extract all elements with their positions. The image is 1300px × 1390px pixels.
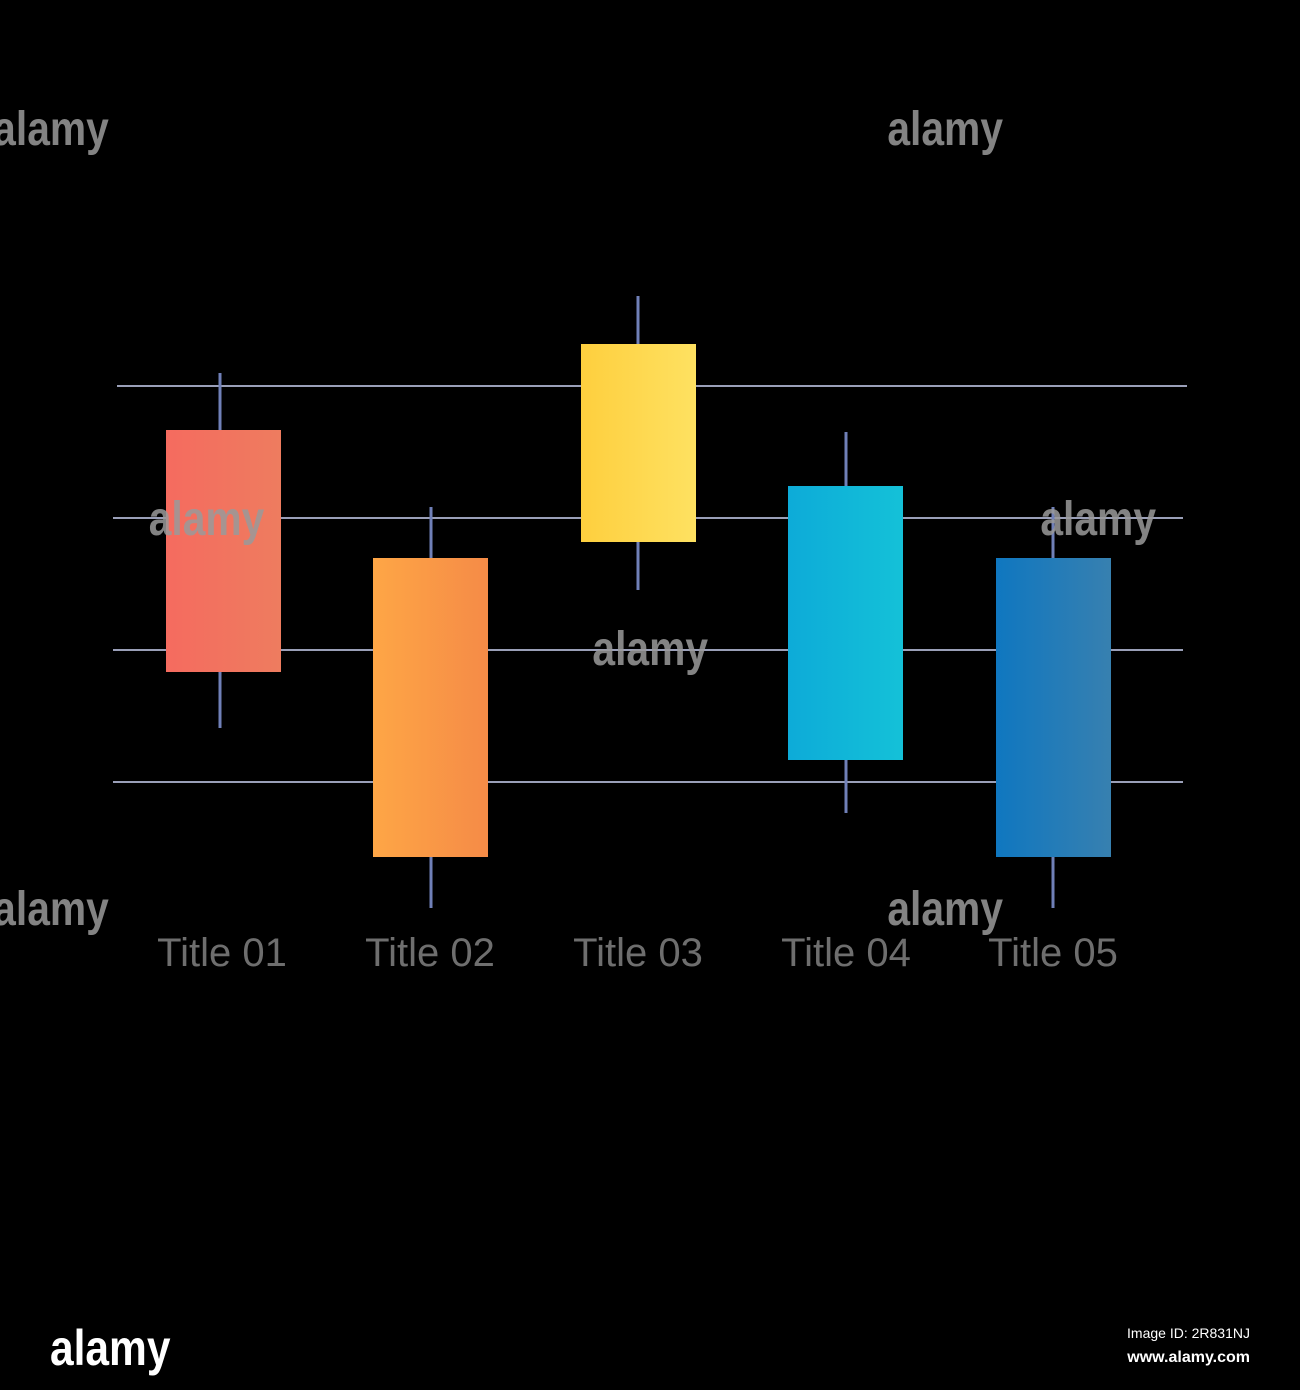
titles: Title 05 (988, 931, 1118, 975)
watermarks: alamy (592, 623, 708, 676)
titles (157, 931, 1118, 975)
watermarks: alamy (887, 103, 1003, 156)
image id: Image ID: 2R831NJ (1127, 1325, 1250, 1341)
grid lines (113, 386, 1187, 782)
candle 3 (581, 296, 696, 590)
watermarks: alamy (149, 493, 265, 546)
titles: Title 04 (781, 931, 911, 975)
candle 5 (996, 507, 1111, 908)
titles: Title 03 (573, 931, 703, 975)
alamy logo: alamy (50, 1320, 171, 1376)
watermarks: alamy (887, 883, 1003, 936)
titles: Title 01 (157, 931, 287, 975)
watermarks (0, 103, 1156, 936)
candle 1 (166, 373, 281, 728)
image id: www.alamy.com (1126, 1349, 1250, 1366)
candle 2 (373, 507, 488, 908)
image id (1126, 1325, 1250, 1366)
candle 4 (788, 432, 903, 813)
titles: Title 02 (365, 931, 495, 975)
watermarks: alamy (1040, 493, 1156, 546)
